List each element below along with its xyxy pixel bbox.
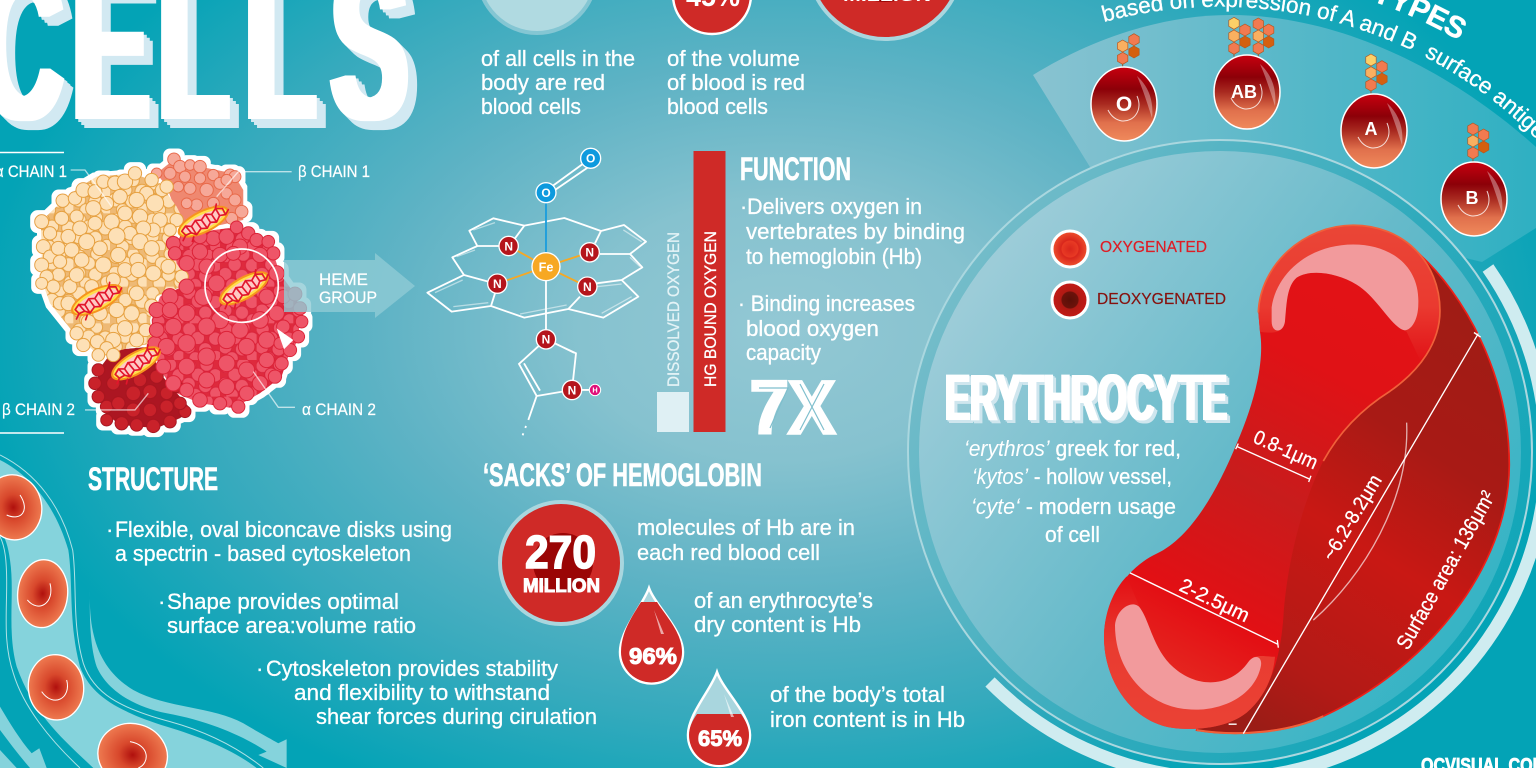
hemoglobin protein model <box>35 153 308 433</box>
blood type cell B: B <box>1466 188 1478 208</box>
stat: volume of blood: blood cells <box>667 94 768 119</box>
leader lines <box>71 170 295 410</box>
stat: 270 million <box>500 502 622 624</box>
text: 96 percent <box>694 588 873 637</box>
measure label: surface area: Surface area: 136μm² <box>1392 487 1500 653</box>
chain base fills <box>41 160 300 428</box>
beta chain 1 spheres <box>151 153 248 224</box>
text: structure bullets: shear forces during cirulation <box>316 704 597 729</box>
atoms: nitrogen <box>488 236 599 400</box>
oxygen capacity bars: HG BOUND OXYGEN <box>701 231 720 387</box>
text: structure bullets: and flexibility to withstand <box>294 680 550 705</box>
gap in protein <box>277 328 293 349</box>
text: structure bullets: · <box>256 656 263 681</box>
bottom lobe highlight <box>1115 604 1261 710</box>
text: etymology: ‘erythros’ greek for red, <box>964 436 1181 461</box>
oxygen capacity bars <box>657 151 726 432</box>
blood type cell B <box>1441 123 1507 236</box>
atom labels: oxygen: O <box>541 186 551 200</box>
heme highlight circle <box>205 249 278 322</box>
text: function bullets: · Binding increases <box>738 291 915 316</box>
dark channel between arrow and vessel <box>0 730 30 768</box>
atom labels: nitrogen: N <box>504 239 513 253</box>
alpha chain 1 spheres <box>35 167 188 362</box>
dimple curve <box>1313 423 1407 620</box>
blood type cell A <box>1341 54 1407 168</box>
text: 65 percent: of the body’s total <box>770 682 945 707</box>
blood type cell AB: AB <box>1231 82 1257 102</box>
bright front face <box>1104 225 1440 729</box>
flow arrow left <box>0 707 47 768</box>
measure label: thickness: 2-2.5μm <box>1176 575 1253 627</box>
text: etymology: of cell <box>1045 522 1100 547</box>
measure label: width: 0.8-1μm <box>1250 426 1321 474</box>
blood type cell AB <box>1214 17 1280 129</box>
text: function bullets: capacity <box>746 340 821 365</box>
stat: share of all cells: of all cells in the <box>481 46 635 71</box>
legend: oxygenated <box>1052 231 1207 267</box>
legend: oxygenated: OXYGENATED <box>1100 239 1207 256</box>
text: structure bullets <box>106 517 597 729</box>
text: etymology: ‘kytos’ - hollow vessel, <box>972 464 1172 489</box>
protein chain labels: β CHAIN 1 <box>298 162 370 181</box>
oxygen capacity bars: DISSOLVED OXYGEN <box>664 232 683 387</box>
drop: 96 percent <box>620 588 683 684</box>
text: 270 million: each red blood cell <box>637 540 820 565</box>
red cell 4 <box>91 716 175 768</box>
porphyrin ring <box>427 218 646 318</box>
text: structure bullets: · <box>106 517 113 542</box>
outer highlight ring <box>990 268 1536 768</box>
text: function bullets: vertebrates by binding <box>746 219 965 244</box>
alpha chain 2 spheres <box>148 221 308 413</box>
drop: 65 percent: 65% <box>698 726 742 751</box>
stat: share of all cells <box>476 0 635 119</box>
top lobe rim <box>1258 225 1440 360</box>
stat: volume of blood: of the volume <box>667 46 800 71</box>
atom labels: nitrogen: N <box>493 277 502 291</box>
heading: structure: STRUCTURE <box>88 461 218 497</box>
protein chain labels: β CHAIN 2 <box>2 400 75 419</box>
stat: large red circle, clipped at top <box>808 0 962 39</box>
text: function bullets: blood oxygen <box>746 316 879 341</box>
atom labels: oxygen: O <box>586 152 595 166</box>
blood type cell A: A <box>1364 119 1378 139</box>
measure label: diameter: ~6.2-8.2μm <box>1318 471 1387 565</box>
flow arrow right <box>90 590 287 768</box>
chain divider lines <box>0 152 64 433</box>
text: structure bullets: Flexible, oval biconcave disks using <box>115 517 452 542</box>
red cell 1 <box>0 470 47 544</box>
stat: share of all cells: body are red <box>481 70 605 95</box>
atom: iron <box>532 253 560 281</box>
erythrocyte cross-section <box>1104 225 1509 734</box>
heme groups <box>64 198 277 388</box>
text: 65 percent: iron content is in Hb <box>770 707 965 732</box>
text: function bullets <box>738 194 965 365</box>
text: function bullets: to hemoglobin (Hb) <box>746 244 922 269</box>
atoms: oxygen <box>536 148 601 203</box>
beta chain 2 spheres <box>89 364 191 433</box>
atom labels: nitrogen <box>493 239 594 397</box>
top outline accent <box>1258 225 1440 461</box>
bonds <box>497 162 595 435</box>
text: etymology: ‘cyte‘ - modern usage <box>971 494 1176 519</box>
double bonds <box>435 223 642 314</box>
main circle disc <box>919 151 1521 753</box>
atom: hydrogen <box>589 384 601 396</box>
red cell 2 <box>15 558 71 630</box>
text: 270 million <box>637 515 855 565</box>
drop: 65 percent <box>688 672 750 766</box>
arrow: heme group: GROUP <box>319 288 377 307</box>
vessel wall lines <box>0 455 263 768</box>
blood type cell O <box>1091 34 1157 141</box>
heading: sacks of hemoglobin: ‘SACKS’ OF HEMOGLOBIN <box>483 457 762 493</box>
legend: deoxygenated: DEOXYGENATED <box>1097 291 1226 308</box>
big number: 7X: 7X <box>750 366 835 449</box>
atom: iron: Fe <box>539 260 553 274</box>
red cell 3 <box>26 652 86 722</box>
stat: share of all cells: blood cells <box>481 94 581 119</box>
dark crescent body <box>1197 253 1509 733</box>
protein spheres with white outline <box>35 153 308 433</box>
arrow: heme group <box>284 253 415 318</box>
main circle outer band <box>908 140 1532 764</box>
legend: deoxygenated <box>1052 282 1226 318</box>
text: structure bullets: surface area:volume ratio <box>167 613 416 638</box>
atom labels: oxygen <box>541 152 595 200</box>
stat: 270 million: MILLION <box>523 576 600 597</box>
text: structure bullets: a spectrin - based cytoskeleton <box>115 541 411 566</box>
measure lines <box>1130 333 1481 734</box>
blood vessel with flowing cells <box>0 455 287 768</box>
heading: erythrocyte: ERYTHROCYTE <box>945 360 1227 434</box>
heading: function: FUNCTION <box>740 151 851 187</box>
atom labels: nitrogen: N <box>583 280 592 294</box>
arrow: heme group: HEME <box>319 270 368 289</box>
text: function bullets: ·Delivers oxygen in <box>740 194 922 219</box>
text: structure bullets: Shape provides optimal <box>167 589 399 614</box>
stat: volume of blood: of blood is red <box>667 70 805 95</box>
stat: 270 million: 270 <box>525 526 596 578</box>
top lobe highlight <box>1272 244 1418 330</box>
text: 65 percent <box>770 682 965 732</box>
text: 96 percent: dry content is Hb <box>694 612 861 637</box>
blood type cell O: O <box>1116 93 1132 116</box>
atom labels: nitrogen: N <box>568 383 576 397</box>
stat: volume of blood <box>667 0 805 119</box>
text: 96 percent: of an erythrocyte’s <box>694 588 873 613</box>
protein chain labels <box>0 162 376 419</box>
atom: hydrogen: H <box>592 386 598 395</box>
text: 270 million: molecules of Hb are in <box>637 515 855 540</box>
atom labels: nitrogen: N <box>542 333 550 347</box>
text: etymology <box>964 436 1181 547</box>
atom labels: nitrogen: N <box>585 246 594 260</box>
blood types wedge <box>1033 15 1536 262</box>
drop: 96 percent: 96% <box>629 643 677 669</box>
text: structure bullets: Cytoskeleton provides stability <box>266 656 558 681</box>
heme molecule diagram <box>427 148 646 435</box>
protein chain labels: α CHAIN 2 <box>302 400 376 419</box>
text: structure bullets: · <box>158 589 165 614</box>
vessel lumen <box>0 460 257 768</box>
bottom lobe rim <box>1104 576 1275 729</box>
crescent bottom edge <box>1197 716 1323 733</box>
